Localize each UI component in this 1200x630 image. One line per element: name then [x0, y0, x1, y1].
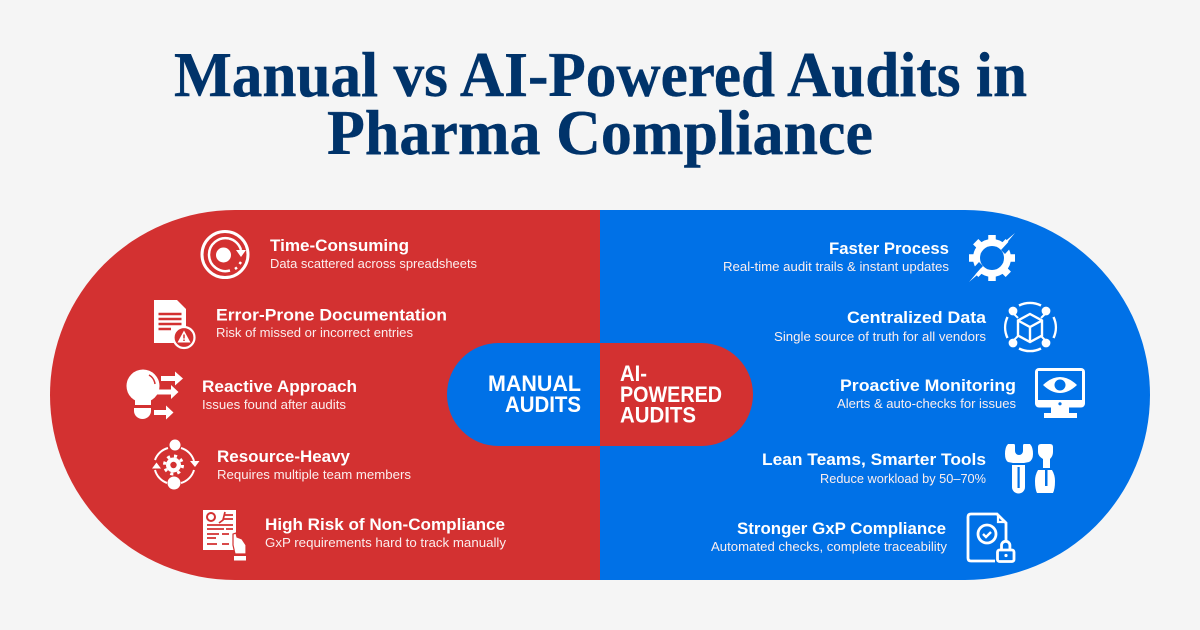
item: time-consuming: Time-Consuming — [270, 237, 409, 255]
item: faster process — [723, 233, 1016, 282]
item: lean teams, smarter tools: Lean Teams, Smarter Tools — [762, 451, 986, 469]
item: centralized data: Centralized Data — [847, 309, 987, 327]
center pill: ai-powered audits: AI- — [620, 361, 647, 386]
item: lean teams, smarter tools — [762, 444, 1055, 494]
icon: document warning — [154, 300, 194, 348]
item: error-prone documentation: Error-Prone Documentation — [216, 306, 447, 324]
item: error-prone documentation — [154, 300, 447, 348]
item: high risk of non-compliance: High Risk of Non-Compliance — [265, 516, 505, 534]
icon: light bulb with arrows — [126, 370, 183, 420]
item: high risk of non-compliance — [203, 510, 507, 560]
item: stronger gxp compliance: Stronger GxP Compliance — [737, 520, 946, 538]
center pill: manual audits: AUDITS — [505, 392, 581, 417]
icon: gear cycle — [152, 440, 200, 490]
item: resource-heavy: Requires multiple team members — [217, 467, 412, 482]
panel: ai-powered audits — [600, 210, 1150, 580]
icon: secure document — [968, 514, 1014, 562]
item: faster process: Faster Process — [829, 240, 949, 258]
title — [174, 39, 1027, 168]
center pill: ai-powered audits — [600, 343, 753, 446]
item: reactive approach: Reactive Approach — [202, 378, 357, 396]
item: resource-heavy — [152, 440, 412, 490]
center pill: ai-powered audits: AUDITS — [620, 402, 696, 428]
item: reactive approach: Issues found after audits — [202, 397, 346, 412]
item: time-consuming: Data scattered across spreadsheets — [270, 256, 477, 271]
item: time-consuming — [202, 232, 477, 278]
center pill: ai-powered audits: POWERED — [620, 382, 722, 407]
icon: monitor with eye — [1035, 368, 1085, 418]
panel: manual audits — [50, 210, 600, 580]
item: faster process: Real-time audit trails & instant updates — [723, 259, 950, 274]
item: lean teams, smarter tools: Reduce workload by 50–70% — [820, 471, 986, 486]
item: centralized data — [774, 303, 1056, 351]
icon: connected cube — [1005, 303, 1056, 351]
item: centralized data: Single source of truth for all vendors — [774, 329, 987, 344]
item: proactive monitoring: Proactive Monitoring — [840, 377, 1016, 395]
item: error-prone documentation: Risk of missed or incorrect entries — [216, 325, 414, 340]
title: Pharma Compliance — [327, 97, 873, 168]
icon: contract with signing hand — [203, 510, 246, 560]
item: stronger gxp compliance — [711, 514, 1014, 562]
item: resource-heavy: Resource-Heavy — [217, 448, 351, 466]
center pill: manual audits: MANUAL — [488, 371, 581, 396]
center pill: manual audits — [447, 343, 600, 446]
item: stronger gxp compliance: Automated checks, complete traceability — [711, 539, 948, 554]
icon: gear with speed streak — [968, 233, 1016, 282]
title: Manual vs AI-Powered Audits in — [174, 39, 1027, 110]
item: high risk of non-compliance: GxP requirements hard to track manually — [265, 535, 507, 550]
item: reactive approach — [126, 370, 357, 420]
item: proactive monitoring: Alerts & auto-checks for issues — [837, 396, 1016, 411]
icon: target clock — [202, 232, 248, 278]
item: proactive monitoring — [837, 368, 1085, 418]
icon: wrench and screwdriver — [1005, 444, 1055, 494]
